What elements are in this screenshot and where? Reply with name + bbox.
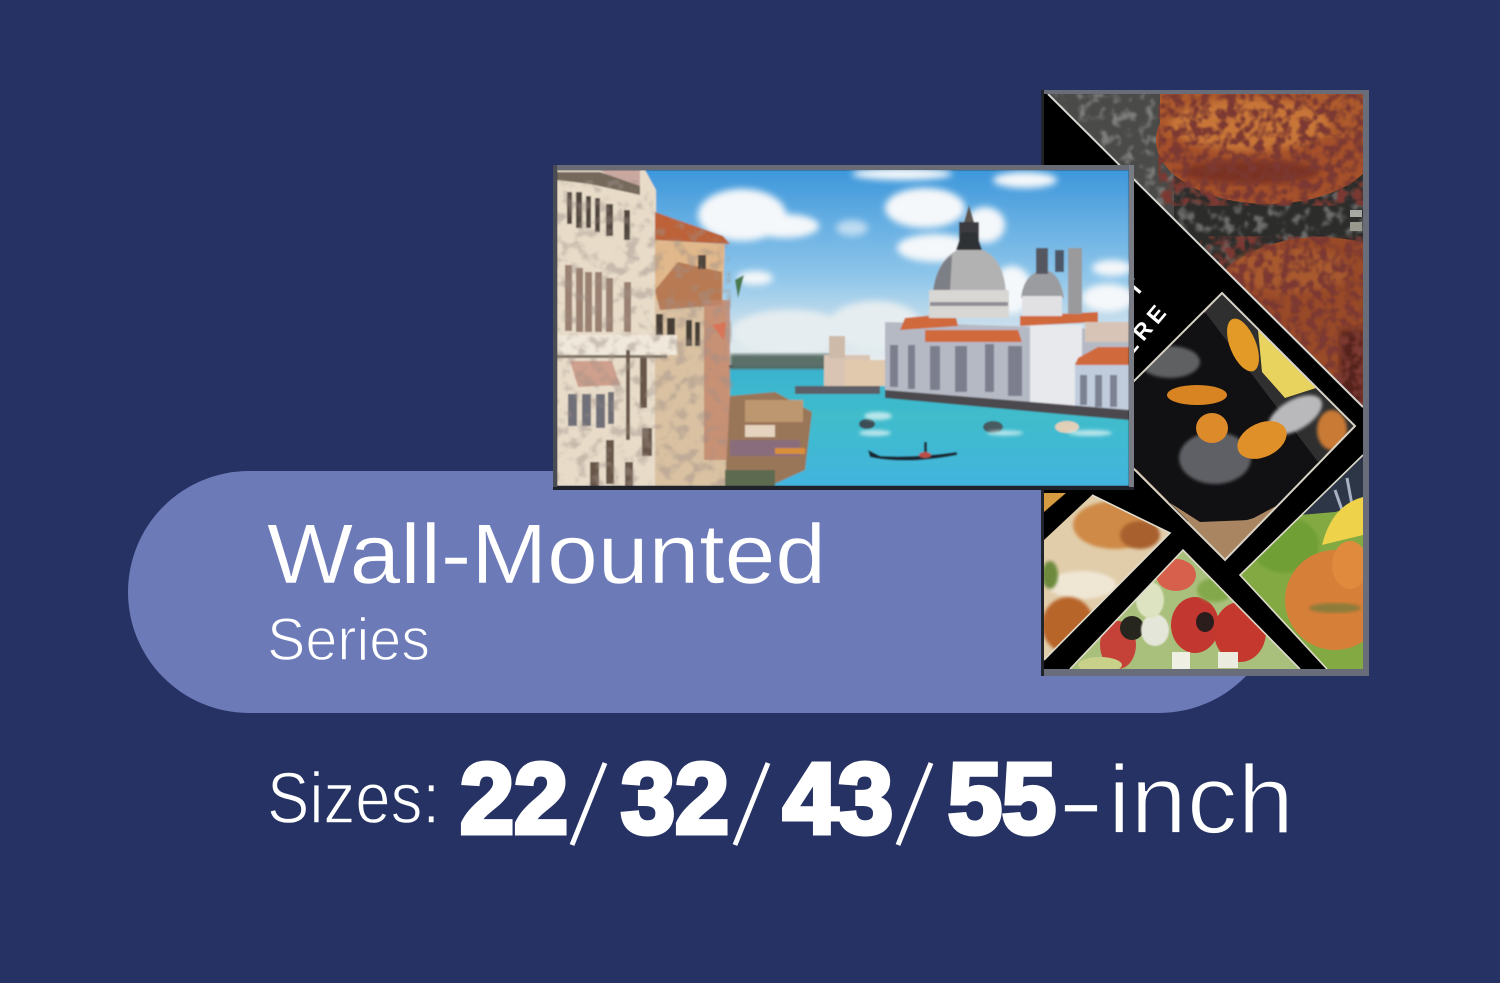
arched windows [565,265,631,332]
distant shore [730,354,830,369]
size 55: 55 [948,743,1056,855]
unit: hyphen: - [1058,749,1104,853]
panel white edges: food tiles [1044,455,1363,669]
left palazzo [557,170,744,486]
label: Sizes: Sizes: [267,759,440,839]
food photo: mussels in a pan [1134,294,1354,558]
series pill banner [128,471,1280,713]
food photo: stone slab with two cutlets [1050,94,1363,408]
gondola [868,442,957,461]
unit: inch: inch [1108,745,1294,854]
awning [570,361,620,387]
panel white edge: mussels [1134,292,1356,562]
sky [644,170,1129,366]
landscape display: Venice canal [553,165,1134,490]
size 32: 32 [621,743,729,855]
size 43: 43 [783,743,893,855]
Santa Maria della Salute domes [929,205,1082,318]
subheading: Series: Series [267,606,430,673]
facade weathering [557,180,735,486]
food photo: Greek salad [1070,550,1302,673]
terracotta roofs [900,312,1129,365]
slash: 22 / 32 [572,763,605,845]
lettering: ERE: ERE [1114,300,1171,361]
right palazzi [845,312,1129,420]
portrait display: food menu [1041,90,1369,676]
infographic canvas [128,90,1369,846]
small boats and wakes [859,412,1112,436]
corner scrap of food [1044,493,1066,512]
slash: 43 / 55 [898,763,931,845]
flags [735,275,744,298]
ledges [557,335,677,355]
diagonal white rule [1048,94,1363,407]
sizes line [267,743,1294,855]
food photo: salmon with lemon and greens [1241,456,1363,669]
lettering: T: T [1120,274,1149,301]
menu lettering on the black band [1134,278,1167,354]
heading: Wall-Mounted: Wall-Mounted [267,507,826,601]
upper windows [567,192,706,269]
clouds [698,168,1134,354]
food photo: shrimp dish [1044,495,1168,659]
water [720,368,1129,486]
waterside market stalls [725,392,812,486]
slash: 32 / 43 [735,763,768,845]
size 22: 22 [460,743,568,855]
small church on the point [795,336,880,394]
